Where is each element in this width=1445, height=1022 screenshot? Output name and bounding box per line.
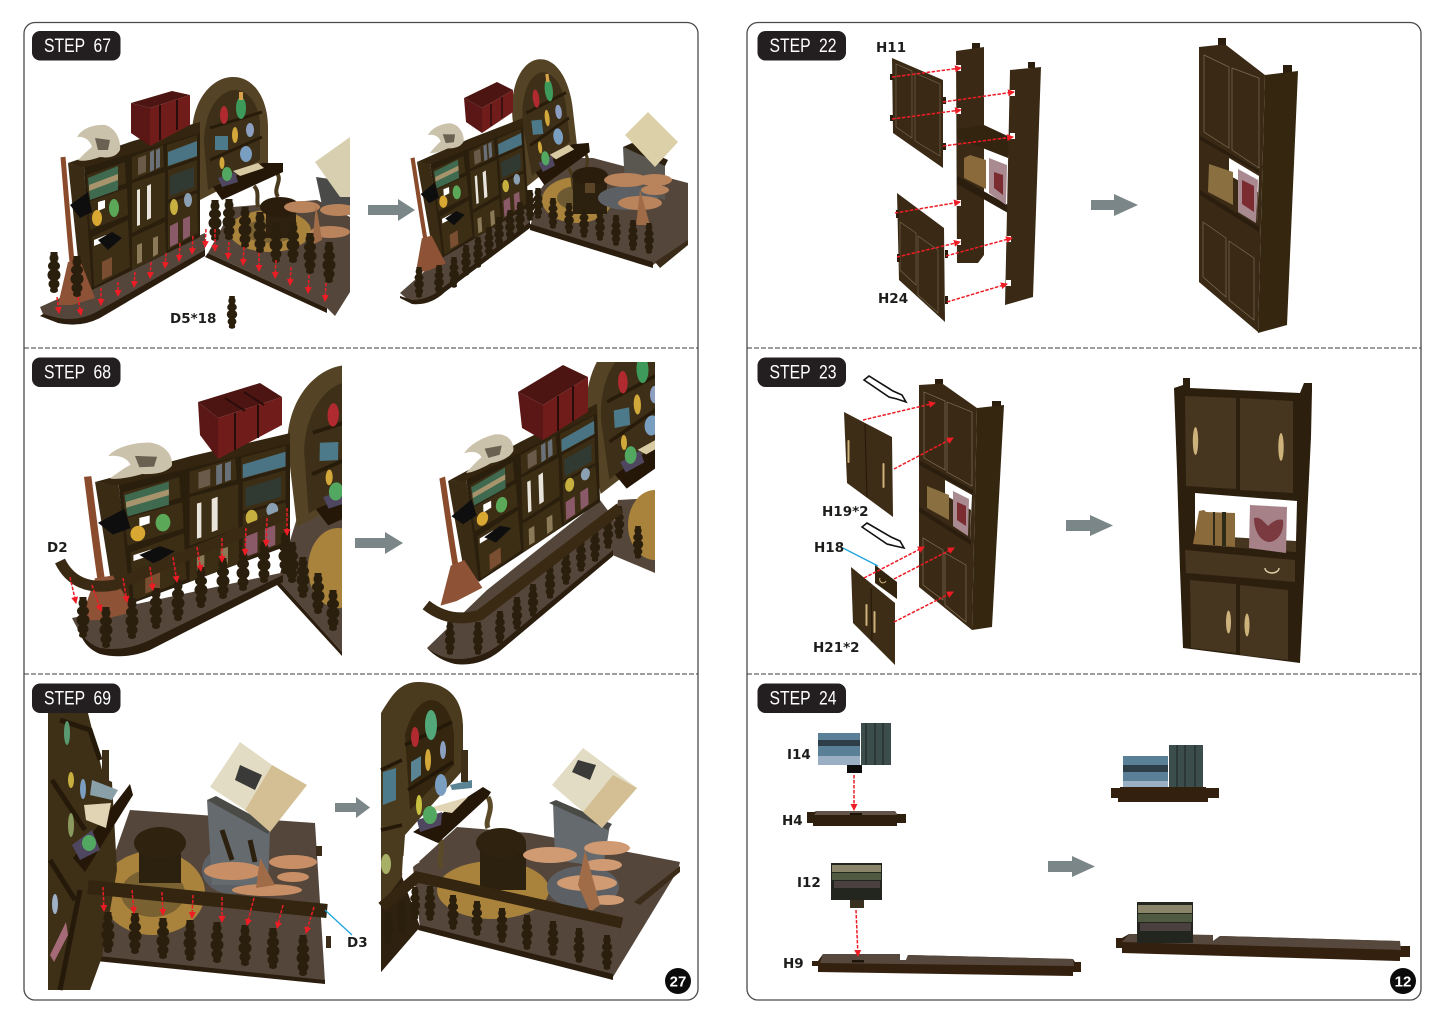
callout line D3 xyxy=(325,910,352,935)
open shelf xyxy=(919,460,973,545)
badge: step 67 xyxy=(32,31,120,60)
label H11: H11 xyxy=(876,40,906,56)
badge: step 68 xyxy=(32,358,120,387)
arch alcove and desk xyxy=(192,77,283,207)
callout line H18 xyxy=(843,548,878,566)
label D5*18: D5*18 xyxy=(170,311,216,327)
door panel lines xyxy=(1203,55,1259,320)
page number 12: 12 xyxy=(1395,974,1411,990)
lectern xyxy=(202,796,272,894)
open book xyxy=(552,748,637,828)
shelf with books I12 xyxy=(1116,902,1410,961)
red dashed arrows xyxy=(57,229,326,315)
scene: step 23 exploded xyxy=(813,376,1004,665)
shelf with books I14 xyxy=(1111,745,1219,802)
label D3: D3 xyxy=(347,935,368,951)
cabinet body xyxy=(1174,378,1312,663)
badge: step 69 xyxy=(32,684,120,713)
arrow: step 68 xyxy=(355,532,403,554)
scene: step 22 exploded xyxy=(876,40,1041,322)
badge: step 69: STEP 69 xyxy=(44,688,111,710)
desk with bottle and book xyxy=(72,750,133,872)
skull xyxy=(464,434,514,473)
balusters xyxy=(414,188,654,298)
right upright xyxy=(1005,62,1041,305)
arrow: step 23 xyxy=(1066,515,1113,536)
left page panel xyxy=(24,22,698,1000)
lectern xyxy=(547,800,619,908)
label H9: H9 xyxy=(783,956,804,972)
page number 27: 27 xyxy=(670,974,686,990)
label H18: H18 xyxy=(814,540,844,556)
icon: glue pen xyxy=(864,376,906,402)
mushroom xyxy=(284,201,350,244)
badge: step 67: STEP 67 xyxy=(44,36,111,57)
doors H19 xyxy=(844,412,893,517)
scene: step 23 finished cabinet xyxy=(1174,378,1312,663)
broom and bats xyxy=(58,157,122,305)
book block I12 xyxy=(831,863,882,908)
rail D2 xyxy=(426,508,620,618)
floor xyxy=(427,490,655,664)
upper doors xyxy=(1185,396,1293,493)
red chest xyxy=(518,365,588,440)
rail D2 xyxy=(60,513,288,586)
arrow: step 69 xyxy=(335,797,370,818)
skull xyxy=(77,125,120,161)
arch wall xyxy=(381,682,463,972)
door H24 xyxy=(896,193,948,322)
floor xyxy=(40,200,350,325)
badge: step 68: STEP 68 xyxy=(44,362,111,384)
centre upright xyxy=(956,43,984,263)
balusters xyxy=(102,912,310,976)
scene: step 24 assembled xyxy=(1111,745,1410,961)
drawer xyxy=(1185,550,1295,582)
label D2: D2 xyxy=(47,540,68,556)
red dashed arrows xyxy=(70,508,287,611)
scene: step 68 after xyxy=(422,362,655,664)
bookcase xyxy=(436,404,602,606)
stool xyxy=(476,828,526,890)
cabinet side xyxy=(972,405,1004,630)
step badges xyxy=(32,31,846,713)
bookcase with broom xyxy=(58,122,200,305)
door lines xyxy=(923,392,972,622)
rail xyxy=(382,877,622,923)
stool xyxy=(134,827,186,883)
doors H21 xyxy=(851,567,895,665)
door H11 xyxy=(890,58,946,168)
scene: step 69 before xyxy=(48,713,352,990)
desk xyxy=(413,750,491,868)
cabinet front xyxy=(919,384,977,630)
red chest xyxy=(464,82,513,133)
shelf H4 xyxy=(807,811,906,826)
red chest xyxy=(198,383,282,459)
label H21*2: H21*2 xyxy=(813,640,860,656)
red dashed arrows xyxy=(892,68,1014,302)
floor xyxy=(413,827,680,980)
red dashed arrows xyxy=(863,403,954,622)
shelves books and butterfly xyxy=(957,125,1012,213)
open book xyxy=(625,112,678,167)
book block I14 xyxy=(818,723,891,773)
badge: step 22: STEP 22 xyxy=(770,36,836,57)
open shelf with books xyxy=(1200,136,1259,232)
page number 12 xyxy=(1390,968,1416,994)
skull xyxy=(108,441,172,479)
side face xyxy=(1258,71,1298,333)
front face xyxy=(1199,45,1265,332)
badge: step 24 xyxy=(758,684,846,713)
page number 27 xyxy=(665,968,691,994)
pegs xyxy=(1218,38,1292,73)
scene: step 24 parts xyxy=(782,723,1081,976)
icon: glue pen xyxy=(862,523,904,548)
icon: baluster part xyxy=(227,296,237,329)
badge: step 22 xyxy=(758,31,846,60)
scene: step 69 after xyxy=(381,682,680,980)
stool xyxy=(260,197,300,238)
red dashed arrows xyxy=(854,775,858,956)
label H24: H24 xyxy=(878,291,908,307)
bookcase body xyxy=(68,122,200,290)
lower doors xyxy=(1190,580,1288,660)
arch and desk xyxy=(288,366,342,527)
lectern and book xyxy=(315,137,350,215)
badge: step 24: STEP 24 xyxy=(770,688,837,710)
props on the floor xyxy=(260,137,356,245)
shelf H9 xyxy=(812,954,1081,976)
scene: step 67 after xyxy=(400,55,688,304)
arch and desk xyxy=(506,55,594,195)
bookcase xyxy=(407,118,532,272)
arrow: step 67 xyxy=(368,199,415,221)
bookcase xyxy=(80,433,290,621)
drawer H18 xyxy=(875,565,897,599)
open shelf xyxy=(1183,493,1297,560)
balusters xyxy=(383,886,613,970)
scene: step 67 before xyxy=(40,77,356,329)
rail D3 xyxy=(88,887,327,911)
mushroom shelves xyxy=(204,855,317,896)
label I14: I14 xyxy=(787,747,811,763)
floor xyxy=(96,810,331,984)
open book xyxy=(210,742,307,832)
lectern xyxy=(623,143,668,200)
pegs xyxy=(935,379,1001,408)
label H19*2: H19*2 xyxy=(822,504,869,520)
badge: step 23 xyxy=(758,358,846,387)
stool xyxy=(572,167,608,214)
balusters D5 xyxy=(48,199,336,297)
balusters xyxy=(445,506,643,655)
mushroom shelves xyxy=(523,841,630,912)
arrow: step 22 xyxy=(1091,194,1138,216)
mushroom shelves xyxy=(598,173,672,225)
balusters xyxy=(76,533,340,648)
label I12: I12 xyxy=(797,875,821,891)
right page panel xyxy=(747,22,1421,1000)
floor xyxy=(72,515,342,656)
red dashed arrows xyxy=(103,887,314,933)
arch and desk xyxy=(588,362,655,494)
floor xyxy=(400,158,688,304)
desk xyxy=(213,157,283,207)
scene: step 22 assembled cabinet xyxy=(1199,38,1298,333)
red chest xyxy=(131,91,190,146)
arch xyxy=(192,77,268,200)
badge: step 23: STEP 23 xyxy=(770,362,836,384)
label H4: H4 xyxy=(782,813,803,829)
wall side with shelves xyxy=(48,713,117,990)
arrow: step 24 xyxy=(1048,856,1095,877)
skull xyxy=(427,122,464,153)
scene: step 68 before xyxy=(55,366,342,656)
